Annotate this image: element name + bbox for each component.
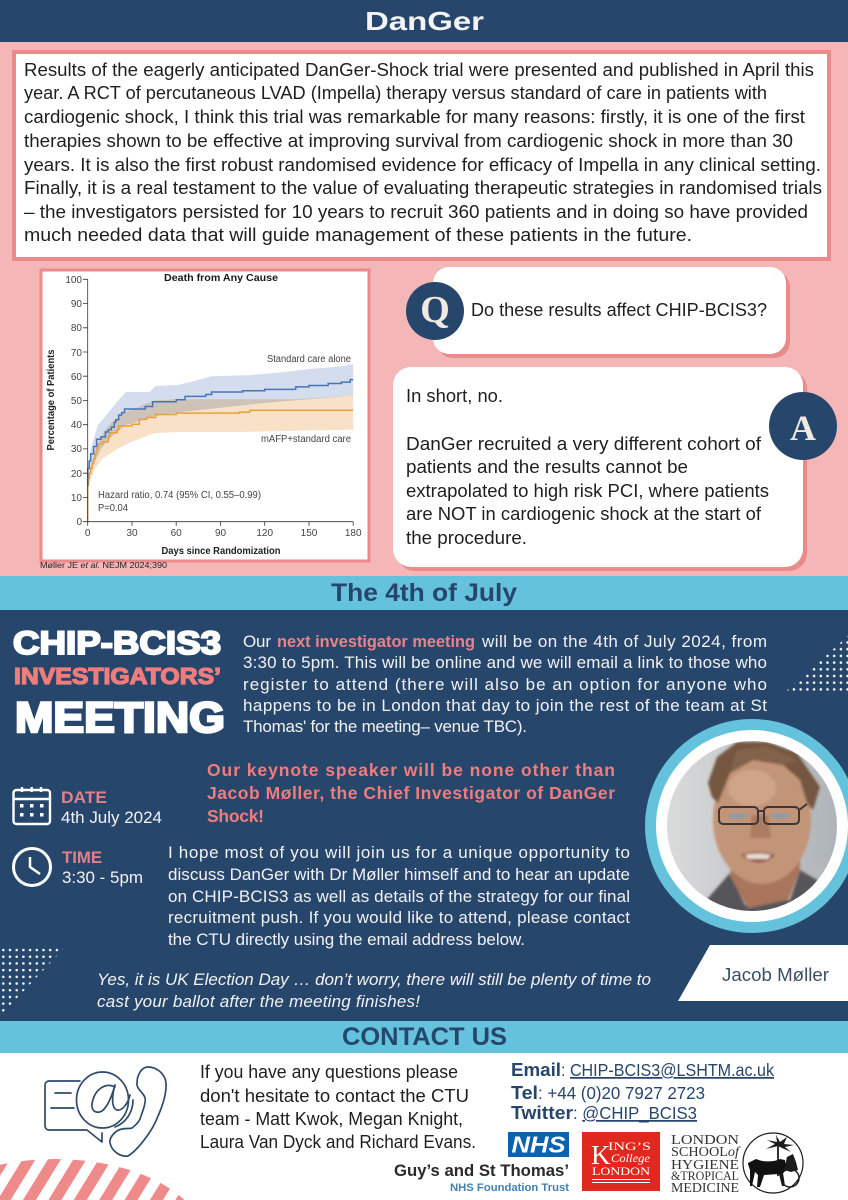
answer text: DanGer recruited a very different cohort of <box>406 433 762 454</box>
text box: DanGer-Shock summary: Results of the eagerly anticipated DanGer-Shock trial were presented and published in April this <box>24 59 814 80</box>
text: next meeting details: Our <box>243 632 271 651</box>
hazard ratio: Hazard ratio, 0.74 (95% CI, 0.55–0.99) <box>98 490 261 501</box>
text: election note: Yes, it is UK Election Day … don’t worry, there will still be plenty of time to <box>97 970 651 989</box>
meeting title lockup: CHIP-BCIS3 <box>13 625 221 661</box>
text: contact message <box>200 1062 476 1152</box>
heading: DanGer: DanGer <box>365 6 484 36</box>
hazard ratio: P=0.04 <box>98 503 128 514</box>
date label: DATE <box>61 788 107 807</box>
panel: DanGer section background <box>0 42 848 576</box>
y tick labels: 60 <box>71 372 82 383</box>
contact details: Twitter <box>511 1102 573 1123</box>
icon: Q badge <box>406 282 464 340</box>
callout: keynote speaker: Shock! <box>207 806 264 826</box>
text: invitation: I hope most of you will join us for a unique opportunity to <box>168 843 630 862</box>
logo: NHS Guy's and St Thomas': NHS Foundation Trust <box>450 1182 569 1194</box>
text: next meeting details: 3:30 to 5pm. This will be online and we will email a link to those who <box>243 653 767 672</box>
contact details <box>511 1059 774 1124</box>
answer text: extrapolated to high risk PCI, where patients <box>406 480 769 501</box>
text box: DanGer-Shock summary: much needed data that will guide management of these patients in the future. <box>24 224 692 245</box>
decoration: dots top right <box>784 636 848 693</box>
answer text: patients and the results cannot be <box>406 456 688 477</box>
series label: mAFP: mAFP+standard care <box>261 434 351 445</box>
text: election note: cast your ballot after the meeting finishes! <box>97 992 420 1011</box>
logo: LSHTM crest <box>743 1133 803 1193</box>
confidence bands and survival curves <box>88 364 353 522</box>
logo: LSHTM: LONDON <box>671 1132 739 1147</box>
x tick labels: 180 <box>345 528 362 539</box>
citation: Møller JE et al. NEJM 2024;390 <box>40 560 167 570</box>
chart title: Death from Any Cause <box>164 272 278 284</box>
answer text: are NOT in cardiogenic shock at the start of <box>406 503 762 524</box>
answer bubble <box>393 367 837 571</box>
y tick labels: 40 <box>71 420 82 431</box>
text: contact message: team - Matt Kwok, Megan Knight, <box>200 1109 463 1129</box>
section band: The 4th of July <box>0 576 848 610</box>
logo: King's College London: LONDON <box>592 1166 651 1178</box>
logo: King's College London: College <box>611 1153 650 1165</box>
callout: keynote speaker <box>207 760 615 826</box>
x tick labels <box>85 528 362 539</box>
logo: NHS Guy's and St Thomas' <box>394 1132 569 1194</box>
time label: TIME <box>62 848 102 867</box>
logo: NHS Guy's and St Thomas': NHS <box>512 1132 566 1158</box>
question text: Do these results affect CHIP-BCIS3? <box>471 299 767 320</box>
x tick labels: 0 <box>85 528 91 539</box>
section band: contact us <box>0 1021 848 1053</box>
time label <box>62 848 143 887</box>
date label <box>61 788 162 827</box>
text: contact message: don't hesitate to contact the CTU <box>200 1086 469 1106</box>
logo: LSHTM: MEDICINE <box>671 1180 739 1195</box>
time label: 3:30 - 5pm <box>62 869 143 887</box>
meeting title lockup: MEETING <box>15 694 225 742</box>
hazard ratio <box>98 490 261 514</box>
text: invitation: the CTU directly using the email address below. <box>168 930 525 949</box>
logo: NHS Guy's and St Thomas': Guy’s and St Thomas’ <box>394 1161 569 1180</box>
name ribbon <box>678 945 848 1001</box>
y tick labels: 10 <box>71 493 82 504</box>
text: next meeting details: register to attend (there will also be an option for anyone who <box>243 675 767 694</box>
icon: Q badge: Q <box>420 289 450 331</box>
logo: LSHTM <box>671 1132 741 1195</box>
x tick labels: 90 <box>215 528 226 539</box>
meeting title lockup <box>13 625 225 742</box>
text box: DanGer-Shock summary: cardiogenic shock, I think this trial was remarkable for many reasons: firstly, it is one of the first <box>24 106 805 127</box>
text box: DanGer-Shock summary: therapies shown to be effective at improving survival from cardiogenic shock in more than 30 <box>24 130 793 151</box>
contact details: : CHIP-BCIS3@LSHTM.ac.uk <box>561 1060 774 1080</box>
text: election note <box>97 970 651 1011</box>
text: next meeting details: happens to be in London that day to join the rest of the team at St <box>243 696 767 715</box>
y tick labels: 90 <box>71 299 82 310</box>
heading: The 4th of July <box>331 579 517 607</box>
icon: calendar <box>14 787 50 824</box>
panel: investigators meeting <box>0 610 848 1021</box>
logo: King's College London: K <box>591 1140 611 1170</box>
question bubble <box>406 267 790 358</box>
text: contact message: Laura Van Dyck and Richard Evans. <box>200 1132 476 1152</box>
logo: King's College London <box>582 1132 660 1191</box>
decoration: dots bottom left <box>2 948 64 1012</box>
y tick labels: 50 <box>71 396 82 407</box>
icon: email and phone <box>45 1067 166 1156</box>
y tick labels <box>65 275 82 528</box>
y tick labels: 70 <box>71 348 82 359</box>
series label: standard care: Standard care alone <box>267 354 351 365</box>
speaker name: Jacob Møller <box>722 965 829 985</box>
heading: CONTACT US <box>342 1023 507 1051</box>
icon: clock <box>14 848 50 886</box>
contact details: : @CHIP_BCIS3 <box>573 1103 697 1124</box>
text: contact message: If you have any questions please <box>200 1062 458 1082</box>
y tick labels: 100 <box>65 275 82 286</box>
y tick labels: 80 <box>71 323 82 334</box>
answer text: In short, no. <box>406 385 503 406</box>
axes <box>83 279 353 526</box>
text box: DanGer-Shock summary: – the investigators persisted for 10 years to recruit 360 patients and in doing so have provided <box>24 201 808 222</box>
text: next meeting details: Thomas' for the meeting– venue TBC). <box>243 717 527 736</box>
portrait: Jacob Møller <box>645 719 848 933</box>
date label: 4th July 2024 <box>61 809 162 827</box>
logo: LSHTM: SCHOOLof <box>671 1144 741 1159</box>
y tick labels: 0 <box>76 517 82 528</box>
x tick labels: 120 <box>256 528 273 539</box>
y axis title: Percentage of Patients <box>46 349 57 450</box>
text: invitation: recruitment push. If you would like to attend, please contact <box>168 908 630 927</box>
x axis title: Days since Randomization <box>162 545 280 557</box>
icon: A badge: A <box>790 408 816 448</box>
contact details: Tel <box>511 1082 538 1103</box>
text box: DanGer-Shock summary: year. A RCT of percutaneous LVAD (Impella) therapy versus standard of care in patients with <box>24 82 767 103</box>
logo: LSHTM: &TROPICAL <box>671 1169 739 1183</box>
callout: keynote speaker: Jacob Møller, the Chief Investigator of DanGer <box>207 783 615 803</box>
y tick labels: 20 <box>71 469 82 480</box>
callout: keynote speaker: Our keynote speaker will be none other than <box>207 760 615 780</box>
x tick labels: 150 <box>301 528 318 539</box>
contact details: : +44 (0)20 7927 2723 <box>538 1083 705 1103</box>
text: next meeting details <box>243 632 767 736</box>
logo: LSHTM: HYGIENE <box>671 1157 739 1172</box>
text: invitation <box>168 843 630 949</box>
y tick labels: 30 <box>71 444 82 455</box>
top header band <box>0 0 848 42</box>
meeting title lockup: INVESTIGATORS’ <box>14 663 221 689</box>
text box: DanGer-Shock summary: years. It is also the first robust randomised evidence for efficacy of Impella in any clinical setting. <box>24 154 821 175</box>
text: next meeting details: next investigator meeting <box>277 633 475 651</box>
text box: DanGer-Shock summary <box>14 52 829 259</box>
text box: DanGer-Shock summary: Finally, it is a real testament to the value of evaluating therapeutic strategies in randomised trials <box>24 177 822 198</box>
answer text: the procedure. <box>406 527 527 548</box>
icon: A badge <box>769 392 837 460</box>
text: invitation: on CHIP-BCIS3 as well as details of the strategy for our final <box>168 887 630 906</box>
answer text <box>406 385 769 548</box>
contact details: Email <box>511 1059 561 1080</box>
logo: King's College London: ING’S <box>608 1141 651 1153</box>
text: invitation: discuss DanGer with Dr Møller himself and to hear an update <box>168 865 630 884</box>
x tick labels: 60 <box>171 528 182 539</box>
decoration: striped arc <box>0 1159 184 1200</box>
text: next meeting details: will be on the 4th of July 2024, from <box>481 632 767 651</box>
chart: death from any cause <box>41 270 369 561</box>
x tick labels: 30 <box>126 528 138 539</box>
